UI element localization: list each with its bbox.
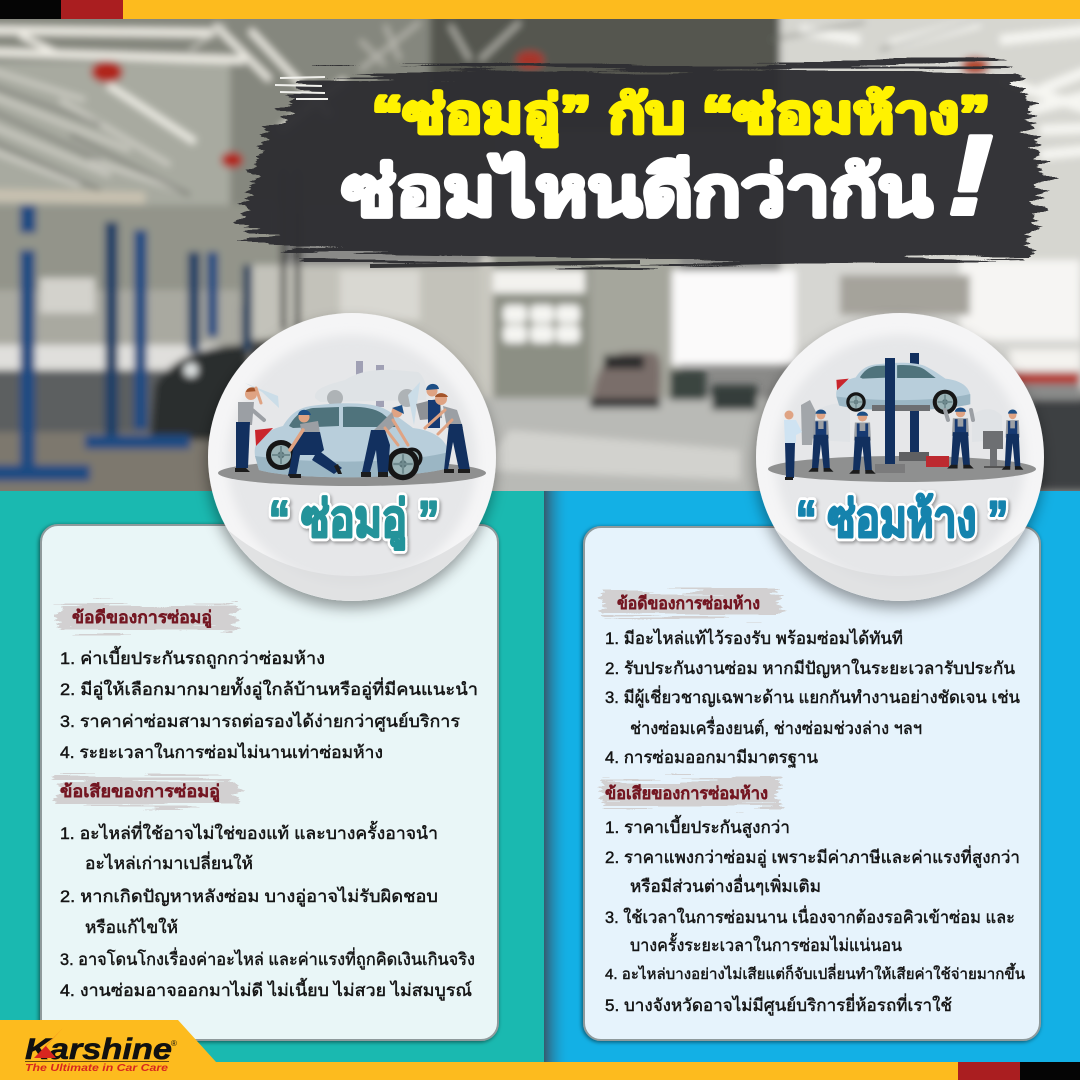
illustration: mechanics at dealership — [768, 353, 1036, 482]
lift back pillar — [910, 353, 919, 453]
label: repair shop: “ ซ่อมอู่ ” — [269, 491, 439, 550]
logo: Karshine: Karshine — [25, 1033, 172, 1066]
list: cons of dealership — [605, 815, 1025, 1016]
logo: Karshine: ® — [171, 1039, 177, 1048]
list: cons of repair shop: หรือแก้ไขให้ — [85, 917, 178, 937]
label: dealership: “ ซ่อมห้าง ” — [796, 491, 1008, 547]
bottom colour bar — [0, 1062, 1080, 1080]
mechanic: kneeling at wheel — [288, 410, 342, 478]
list: cons of repair shop — [60, 821, 475, 1001]
heading: pros of repair shop — [58, 604, 236, 631]
heading: cons of repair shop: ข้อเสียของการซ่อมอู่ — [60, 781, 220, 803]
logo: Karshine — [25, 1028, 177, 1074]
title: ซ่อมไหนดีกว่ากัน — [342, 152, 932, 230]
red lamps — [91, 61, 123, 83]
list: pros of repair shop: 1. ค่าเบี้ยประกันรถถูกกว่าซ่อมห้าง — [60, 646, 325, 669]
title brush banner — [240, 66, 1042, 266]
badge: dealership — [756, 313, 1044, 601]
dark parked car — [150, 345, 260, 440]
blurred garage photo background — [0, 0, 1080, 502]
list: cons of dealership: หรือมีส่วนต่างอื่นๆเพิ่มเติม — [630, 874, 821, 896]
faded rear worker — [801, 400, 816, 445]
list: cons of repair shop: 2. หากเกิดปัญหาหลังซ่อม บางอู่อาจไม่รับผิดชอบ — [60, 886, 438, 907]
list: cons of dealership: 5. บางจังหวัดอาจไม่มีศูนย์บริการยี่ห้อรถที่เราใช้ — [605, 993, 952, 1016]
list: pros of repair shop — [60, 646, 478, 762]
rear car on lift — [315, 361, 427, 407]
mechanic: arms raised — [945, 408, 974, 468]
lift front pillar — [885, 358, 895, 464]
blue lift columns — [0, 205, 252, 481]
list: pros of repair shop: 4. ระยะเวลาในการซ่อมไม่นานเท่าซ่อมห้าง — [60, 742, 383, 762]
mechanic: right of hood — [425, 393, 470, 473]
title: ! — [947, 112, 993, 238]
list: pros of dealership: 2. รับประกันงานซ่อม หากมีปัญหาในระยะเวลารับประกัน — [605, 658, 1015, 678]
door window panes — [503, 305, 580, 343]
list: pros of repair shop: 3. ราคาค่าซ่อมสามารถต่อรองได้ง่ายกว่าศูนย์บริการ — [60, 711, 460, 732]
list: pros of dealership: 1. มีอะไหล่แท้ไว้รองรับ พร้อมซ่อมได้ทันที — [605, 628, 903, 648]
panel: blue background — [544, 491, 1080, 1063]
list: pros of dealership: ช่างซ่อมเครื่องยนต์, ช่างซ่อมช่วงล่าง ฯลฯ — [630, 716, 922, 738]
heading: pros of dealership — [602, 590, 780, 617]
ceiling — [0, 0, 500, 210]
mechanic: standing at rear — [235, 387, 264, 472]
list: cons of repair shop: อะไหล่เก่ามาเปลี่ยนให้ — [85, 851, 253, 873]
faded rear cars — [815, 403, 1002, 442]
list: cons of repair shop: 4. งานซ่อมอาจออกมาไม่ดี ไม่เนี้ยบ ไม่สวย ไม่สมบูรณ์ — [60, 978, 472, 1001]
light beams — [0, 195, 255, 272]
heading: cons of dealership — [602, 780, 780, 807]
list: cons of dealership: บางครั้งระยะเวลาในการซ่อมไม่แน่นอน — [630, 933, 902, 955]
list: cons of repair shop: 1. อะไหล่ที่ใช้อาจไม่ใช่ของแท้ และบางครั้งอาจนำ — [60, 821, 438, 843]
logo: Karshine: The Ultimate in Car Care — [25, 1063, 169, 1074]
lifted car — [836, 363, 970, 410]
label: repair shop: “ ซ่อมอู่ ” — [269, 491, 439, 550]
badge: repair shop — [208, 313, 496, 601]
dark poles — [250, 170, 300, 360]
toolbox — [926, 456, 949, 467]
panel: repair-shop text card — [41, 525, 498, 1040]
list: pros of dealership — [605, 628, 1020, 768]
logo tab — [0, 1020, 260, 1080]
mechanic: shaking hands — [808, 410, 834, 472]
list: cons of dealership: 4. อะไหล่บางอย่างไม่เสียแต่ก็จับเปลี่ยนทำให้เสียค่าใช้จ่ายมากขึ้น — [605, 963, 1025, 983]
list: pros of dealership: 4. การซ่อมออกมามีมาตรฐาน — [605, 748, 818, 768]
panel: teal background — [0, 491, 544, 1063]
list: pros of repair shop: 2. มีอู่ให้เลือกมากมายทั้งอู่ใกล้บ้านหรืออู่ที่มีคนแนะนำ — [60, 677, 478, 700]
heading: cons of repair shop — [58, 778, 236, 805]
illustration: mechanics at repair shop — [218, 361, 486, 486]
panel: dealership text card — [584, 527, 1040, 1040]
divider shadow — [544, 491, 570, 1063]
back walls — [0, 205, 280, 305]
title: “ซ่อมอู่” กับ “ซ่อมห้าง” — [372, 86, 990, 147]
list: cons of repair shop: 3. อาจโดนโกงเรื่องค่าอะไหล่ และค่าแรงที่ถูกคิดเงินเกินจริง — [60, 947, 475, 970]
mechanic: at engine — [1002, 410, 1024, 470]
title — [342, 86, 993, 238]
heading: pros of dealership: ข้อดีของการซ่อมห้าง — [617, 593, 760, 613]
label: dealership: “ ซ่อมห้าง ” — [796, 491, 1008, 547]
list: cons of dealership: 3. ใช้เวลาในการซ่อมนาน เนื่องจากต้องรอคิวเข้าซ่อม และ — [605, 905, 1015, 927]
mechanic: holding part overhead — [849, 412, 876, 474]
heading: cons of dealership: ข้อเสียของการซ่อมห้าง — [605, 783, 768, 803]
customer — [784, 410, 802, 480]
list: cons of dealership: 2. ราคาแพงกว่าซ่อมอู่ เพราะมีค่าภาษีและค่าแรงที่สูงกว่า — [605, 845, 1020, 868]
mechanic: rear of hood — [416, 384, 442, 428]
mechanic: bent over hood — [361, 405, 408, 477]
far parked cars — [592, 352, 661, 408]
panel: repair-shop text — [58, 604, 478, 1001]
engine on stand — [983, 431, 1004, 468]
list: pros of dealership: 3. มีผู้เชี่ยวชาญเฉพาะด้าน แยกกันทำงานอย่างชัดเจน เช่น — [605, 685, 1020, 708]
floor — [470, 398, 770, 498]
list: cons of dealership: 1. ราคาเบี้ยประกันสูงกว่า — [605, 815, 790, 838]
heading: pros of repair shop: ข้อดีของการซ่อมอู่ — [72, 607, 212, 629]
top colour bar — [0, 0, 1080, 19]
panel: dealership text — [602, 590, 1025, 1016]
